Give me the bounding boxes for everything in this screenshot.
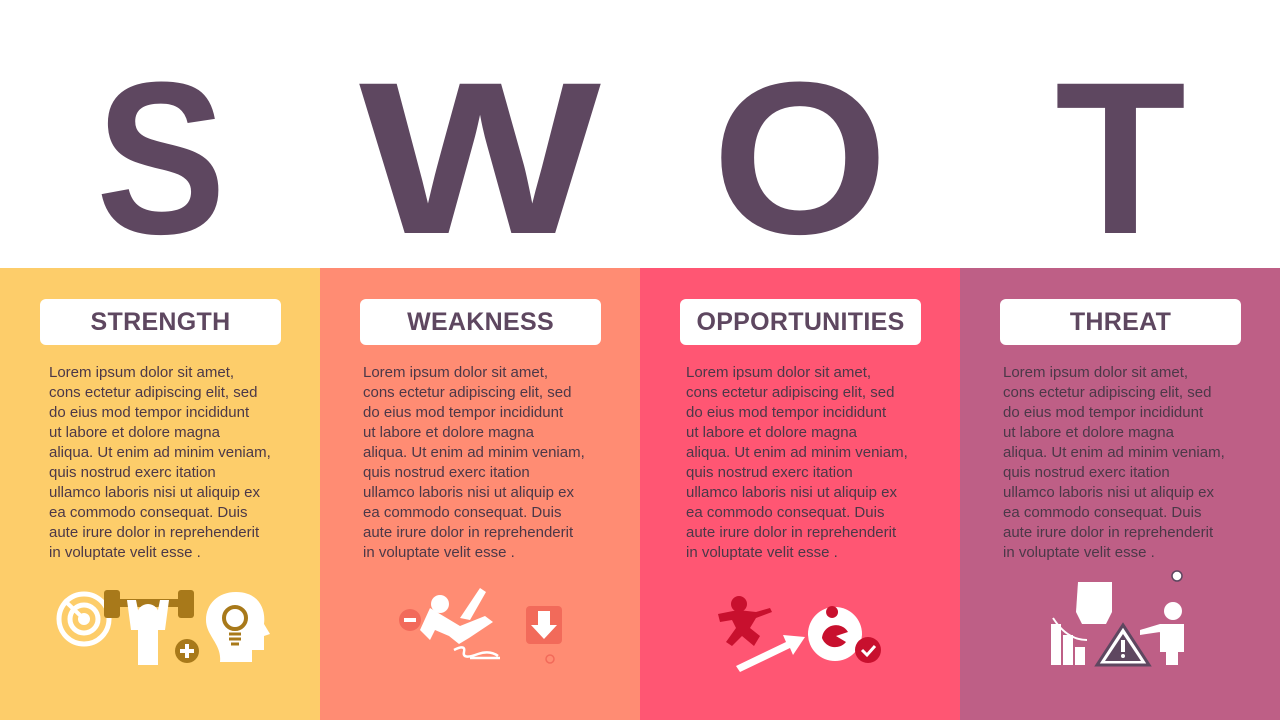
text: weakness: do eius mod tempor incididunt: [363, 404, 563, 421]
icons: strength: [56, 590, 270, 665]
panel: threat: [960, 268, 1280, 720]
text: threat: quis nostrud exerc itation: [1003, 464, 1170, 481]
text: strength: aliqua. Ut enim ad minim veniam,: [49, 444, 271, 461]
text: opportunities: aute irure dolor in reprehenderit: [686, 524, 896, 541]
text: weakness: in voluptate velit esse .: [363, 544, 515, 561]
text: threat: [1003, 364, 1225, 561]
text: opportunities: do eius mod tempor incididunt: [686, 404, 886, 421]
text: weakness: [363, 364, 585, 561]
text: weakness: cons ectetur adipiscing elit, sed: [363, 384, 571, 401]
text: weakness: ea commodo consequat. Duis: [363, 504, 561, 521]
heading: opportunities: [680, 299, 921, 345]
icons: weakness: [399, 588, 562, 664]
text: strength: Lorem ipsum dolor sit amet,: [49, 364, 234, 381]
panel: opportunities: [640, 268, 960, 720]
text: weakness: ullamco laboris nisi ut aliquip ex: [363, 484, 574, 501]
text: opportunities: ut labore et dolore magna: [686, 424, 857, 441]
heading: strength: [40, 299, 281, 345]
text: threat: cons ectetur adipiscing elit, sed: [1003, 384, 1211, 401]
title letters SWOT: [96, 37, 1186, 268]
text: threat: aliqua. Ut enim ad minim veniam,: [1003, 444, 1225, 461]
text: strength: in voluptate velit esse .: [49, 544, 201, 561]
icons: threat: [1051, 570, 1184, 666]
text: threat: in voluptate velit esse .: [1003, 544, 1155, 561]
text: threat: ea commodo consequat. Duis: [1003, 504, 1201, 521]
heading: threat: THREAT: [1070, 308, 1171, 336]
text: strength: ut labore et dolore magna: [49, 424, 220, 441]
heading: strength: STRENGTH: [91, 308, 230, 336]
text: weakness: aute irure dolor in reprehenderit: [363, 524, 573, 541]
text: strength: quis nostrud exerc itation: [49, 464, 216, 481]
heading: opportunities: OPPORTUNITIES: [696, 308, 905, 336]
text: opportunities: [686, 364, 908, 561]
text: strength: [49, 364, 271, 561]
text: threat: do eius mod tempor incididunt: [1003, 404, 1203, 421]
text: threat: ut labore et dolore magna: [1003, 424, 1174, 441]
text: opportunities: ullamco laboris nisi ut aliquip ex: [686, 484, 897, 501]
text: threat: ullamco laboris nisi ut aliquip ex: [1003, 484, 1214, 501]
text: strength: ullamco laboris nisi ut aliquip ex: [49, 484, 260, 501]
panel: weakness: [320, 268, 640, 720]
text: opportunities: in voluptate velit esse .: [686, 544, 838, 561]
text: threat: Lorem ipsum dolor sit amet,: [1003, 364, 1188, 381]
text: strength: cons ectetur adipiscing elit, sed: [49, 384, 257, 401]
text: weakness: aliqua. Ut enim ad minim veniam,: [363, 444, 585, 461]
text: strength: do eius mod tempor incididunt: [49, 404, 249, 421]
text: opportunities: cons ectetur adipiscing elit, sed: [686, 384, 894, 401]
panel: strength: [0, 268, 320, 720]
text: weakness: Lorem ipsum dolor sit amet,: [363, 364, 548, 381]
heading: weakness: [360, 299, 601, 345]
heading: threat: [1000, 299, 1241, 345]
text: opportunities: quis nostrud exerc itation: [686, 464, 853, 481]
text: weakness: ut labore et dolore magna: [363, 424, 534, 441]
text: strength: aute irure dolor in reprehenderit: [49, 524, 259, 541]
text: strength: ea commodo consequat. Duis: [49, 504, 247, 521]
text: opportunities: aliqua. Ut enim ad minim veniam,: [686, 444, 908, 461]
icons: opportunities: [718, 596, 881, 672]
text: weakness: quis nostrud exerc itation: [363, 464, 530, 481]
text: opportunities: Lorem ipsum dolor sit amet,: [686, 364, 871, 381]
heading: weakness: WEAKNESS: [407, 308, 554, 336]
text: threat: aute irure dolor in reprehenderit: [1003, 524, 1213, 541]
text: opportunities: ea commodo consequat. Duis: [686, 504, 884, 521]
